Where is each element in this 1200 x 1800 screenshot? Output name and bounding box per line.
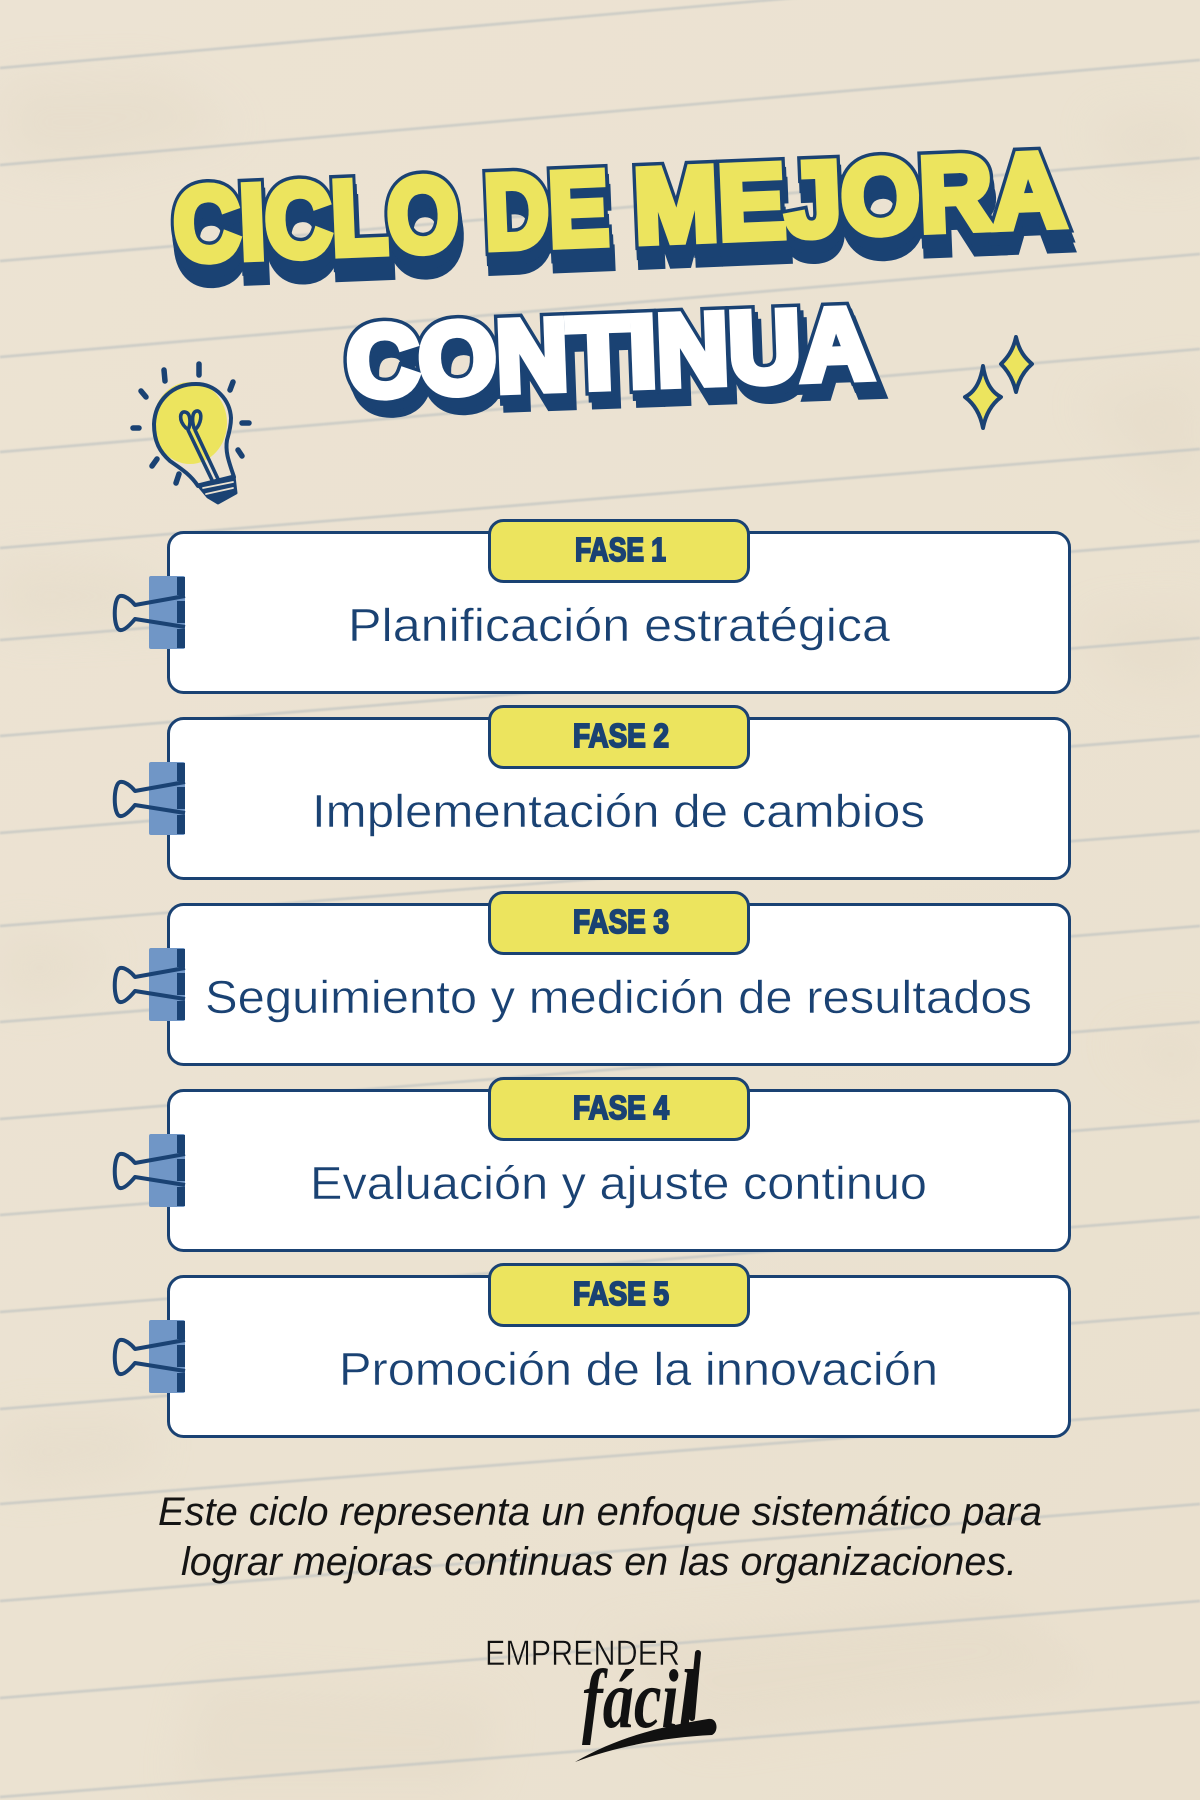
title line 1: CICLO DE MEJORA: DE [482, 150, 611, 272]
panel: fase 5 [115, 1264, 1070, 1436]
panel: fase 2 [115, 706, 1070, 878]
icon: binder clip 1 [115, 576, 185, 649]
title line 2: CONTINUA: CONTINUA [351, 302, 881, 433]
icon: light bulb [133, 364, 249, 503]
title line 1: CICLO DE MEJORA: DE [485, 170, 613, 292]
title line 1: CICLO DE MEJORA: CICLO [173, 166, 462, 294]
title line 1: CICLO DE MEJORA [171, 131, 1070, 304]
tab: FASE 2: FASE 2 [573, 717, 669, 754]
title line 1: CICLO DE MEJORA: CICLO [174, 176, 463, 304]
title line 1: CICLO DE MEJORA: MEJORA [632, 131, 1067, 266]
panel: fase 1 [115, 520, 1070, 692]
icon: binder clip 2 [115, 762, 185, 835]
logo: Emprender fácil: EMPRENDER [485, 1634, 680, 1673]
closing caption: Este ciclo representa un enfoque sistemático para [158, 1490, 1042, 1534]
icon: binder clip 4 [115, 1134, 185, 1207]
tab: FASE 5: FASE 5 [573, 1275, 669, 1312]
title line 1: CICLO DE MEJORA: MEJORA [632, 131, 1067, 266]
title line 1: CICLO DE MEJORA: MEJORA [633, 141, 1069, 276]
phase text 4: Evaluación y ajuste continuo [310, 1157, 927, 1209]
title line 1: CICLO DE MEJORA: MEJORA [635, 151, 1070, 286]
closing caption: lograr mejoras continuas en las organizaciones. [181, 1540, 1017, 1584]
tab: FASE 4 [490, 1078, 748, 1140]
phase text 5: Promoción de la innovación [339, 1343, 938, 1395]
tab: FASE 2 [490, 706, 748, 768]
tab: FASE 1 [490, 520, 748, 582]
title line 1: CICLO DE MEJORA: DE [482, 150, 611, 272]
tab: FASE 5 [490, 1264, 748, 1326]
closing caption [158, 1490, 1042, 1584]
title line 1: CICLO DE MEJORA: CICLO [171, 156, 461, 284]
logo: Emprender fácil: fácil [582, 1653, 696, 1746]
tab: FASE 3 [490, 892, 748, 954]
icon: sparkles [965, 337, 1032, 428]
tab: FASE 1: FASE 1 [575, 531, 666, 568]
title line 1: CICLO DE MEJORA: DE [483, 160, 612, 282]
title line 2: CONTINUA: CONTINUA [348, 295, 878, 426]
phase text 2: Implementación de cambios [312, 785, 925, 837]
panel: fase 3 [115, 892, 1070, 1064]
title line 2: CONTINUA: CONTINUA [345, 288, 874, 419]
icon: binder clip 5 [115, 1320, 185, 1393]
phase text 1: Planificación estratégica [348, 599, 890, 651]
phase text 3: Seguimiento y medición de resultados [205, 971, 1032, 1023]
tab: FASE 3: FASE 3 [573, 903, 669, 940]
title line 2: CONTINUA: CONTINUA [345, 288, 874, 419]
logo: Emprender fácil [485, 1634, 717, 1762]
icon: binder clip 3 [115, 948, 185, 1021]
title line 1: CICLO DE MEJORA: CICLO [171, 156, 461, 284]
tab: FASE 4: FASE 4 [573, 1089, 670, 1126]
panel: fase 4 [115, 1078, 1070, 1250]
